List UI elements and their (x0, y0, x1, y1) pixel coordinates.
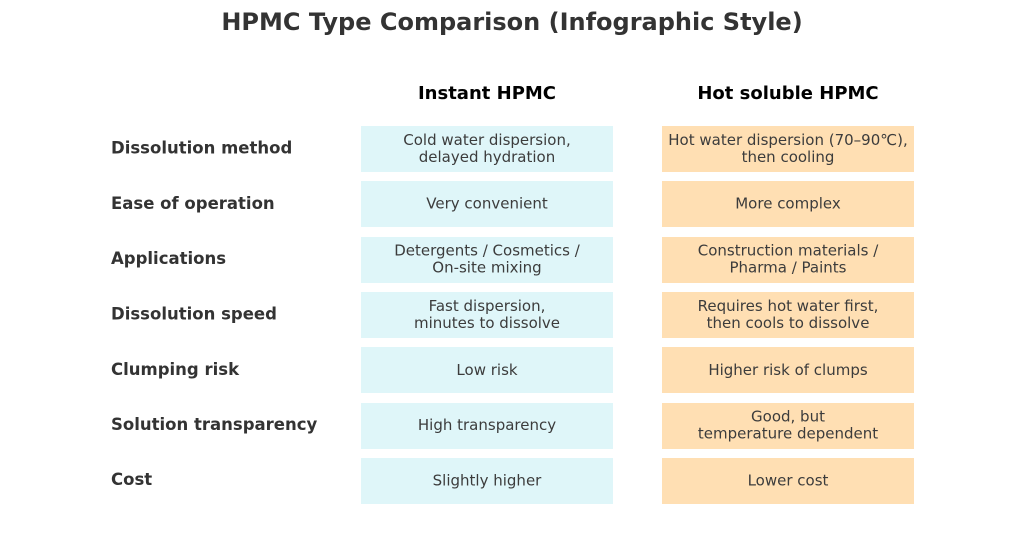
hot soluble cell (662, 181, 914, 227)
instant cell (361, 237, 613, 283)
row label: Applications (111, 249, 226, 268)
instant cell: Very convenient (426, 194, 548, 212)
instant cell: Low risk (456, 361, 518, 379)
instant cell (361, 292, 613, 338)
row: Dissolution method (111, 126, 914, 172)
hot soluble cell (662, 403, 914, 449)
hot soluble cell (662, 237, 914, 283)
column heading: Hot soluble HPMC: Hot soluble HPMC (697, 83, 879, 104)
instant cell: Cold water dispersion, (403, 131, 571, 149)
hot soluble cell (662, 347, 914, 393)
hot soluble cell (662, 458, 914, 504)
column heading: Instant HPMC: Instant HPMC (418, 83, 556, 104)
hot soluble cell: Requires hot water first, (698, 297, 878, 315)
title: HPMC Type Comparison (Infographic Style) (221, 8, 803, 36)
row: Solution transparency (111, 403, 914, 449)
hot soluble cell: Higher risk of clumps (708, 361, 868, 379)
row label: Solution transparency (111, 415, 318, 434)
row: Ease of operation (111, 181, 914, 227)
instant cell: Slightly higher (433, 472, 542, 490)
instant cell: Detergents / Cosmetics / (394, 242, 581, 260)
hot soluble cell: then cools to dissolve (707, 314, 869, 332)
row label: Cost (111, 470, 152, 489)
row: Dissolution speed (111, 292, 914, 338)
hot soluble cell: Pharma / Paints (730, 258, 847, 276)
instant cell: On-site mixing (432, 258, 542, 276)
hot soluble cell: then cooling (742, 148, 834, 166)
hot soluble cell (662, 126, 914, 172)
instant cell: High transparency (418, 416, 556, 434)
row label: Clumping risk (111, 360, 240, 379)
row: Applications (111, 237, 914, 283)
row: Cost (111, 458, 914, 504)
hot soluble cell: Construction materials / (698, 242, 879, 260)
hot soluble cell: More complex (735, 194, 841, 212)
hot soluble cell: Hot water dispersion (70–90℃), (668, 131, 908, 149)
instant cell: minutes to dissolve (414, 314, 560, 332)
row label: Ease of operation (111, 194, 275, 213)
hot soluble cell: temperature dependent (698, 424, 878, 442)
hot soluble cell: Good, but (751, 408, 825, 426)
instant cell (361, 403, 613, 449)
row label: Dissolution speed (111, 304, 277, 324)
instant cell: Fast dispersion, (429, 297, 545, 315)
row label: Dissolution method (111, 138, 292, 158)
instant cell (361, 126, 613, 172)
instant cell (361, 347, 613, 393)
hot soluble cell (662, 292, 914, 338)
instant cell (361, 181, 613, 227)
hot soluble cell: Lower cost (748, 472, 829, 490)
instant cell: delayed hydration (419, 148, 555, 166)
instant cell (361, 458, 613, 504)
row: Clumping risk (111, 347, 914, 393)
